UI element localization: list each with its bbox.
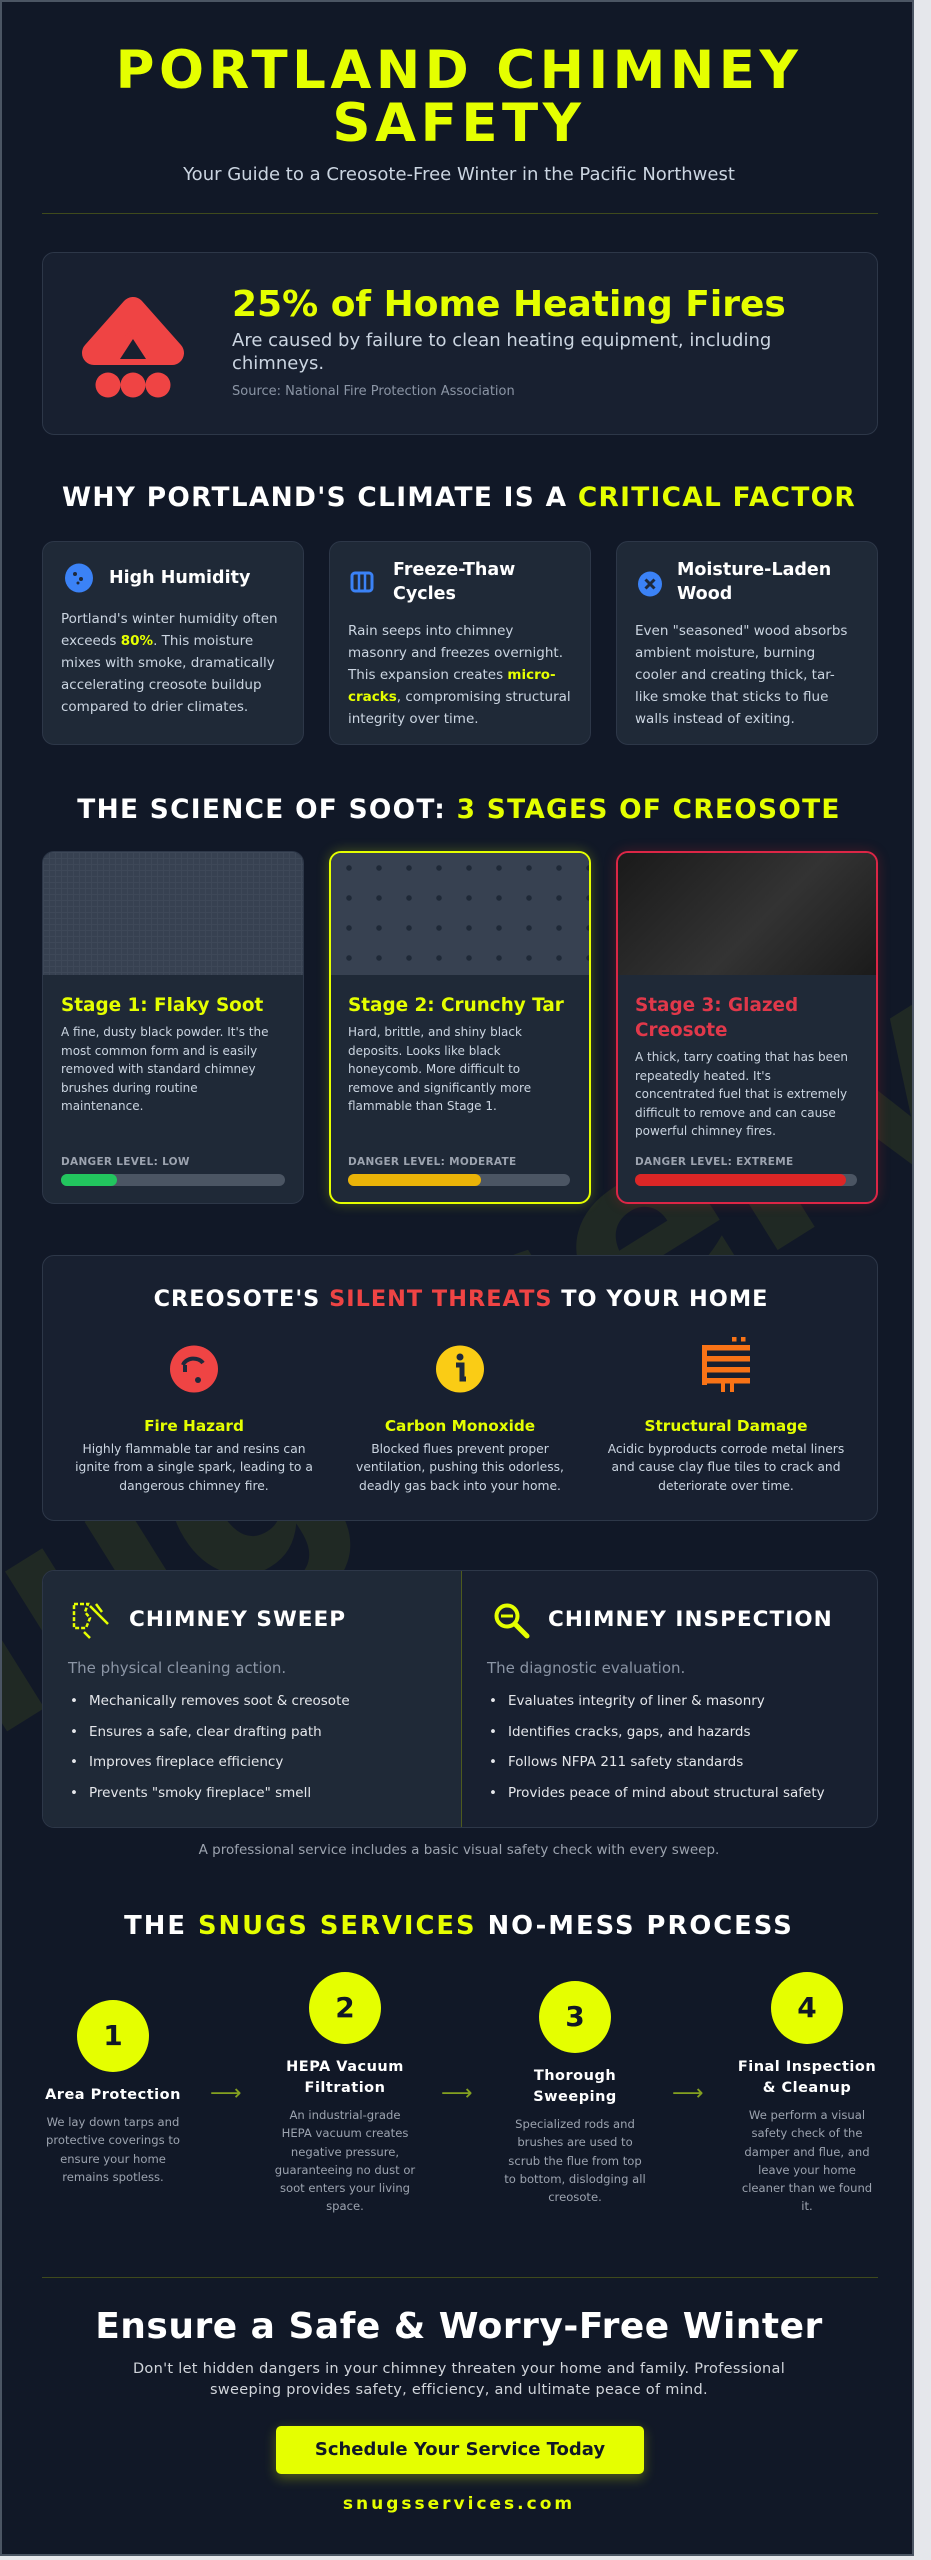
panel: sweep vs inspection — [42, 1570, 878, 1828]
sweep column: CHIMNEY SWEEP — [129, 1607, 346, 1632]
card: wood — [616, 541, 878, 745]
card: humidity: High Humidity — [109, 568, 250, 588]
icon: freeze — [350, 572, 374, 592]
CTA button — [276, 2426, 644, 2474]
step 1: We lay down tarps and protective coverings to ensure your home remains spotless. — [46, 2115, 180, 2184]
sweep column: Improves fireplace efficiency — [89, 1754, 283, 1770]
card: wood: Wood — [677, 584, 732, 604]
danger bar moderate — [348, 1174, 570, 1186]
sweep column: The physical cleaning action. — [68, 1659, 286, 1677]
threat: structural: Acidic byproducts corrode metal liners and cause clay flue tiles to crack and deteriorate over time. — [608, 1442, 844, 1493]
step 1 — [45, 2000, 181, 2184]
stat card — [42, 252, 878, 435]
threat: CO: Carbon Monoxide — [385, 1417, 535, 1435]
sweep column: Mechanically removes soot & creosote — [89, 1693, 350, 1709]
source: Source: National Fire Protection Association — [232, 384, 515, 399]
footnote: A professional service includes a basic visual safety check with every sweep. — [199, 1842, 719, 1858]
arrow 1: ⟶ — [210, 2081, 242, 2106]
step 4: We perform a visual safety check of the damper and flue, and leave your home cleaner than we found it. — [742, 2108, 872, 2213]
card: wood: Moisture-Laden — [677, 560, 831, 580]
arrow 3: ⟶ — [672, 2081, 704, 2106]
stage 2 card: DANGER LEVEL: MODERATE — [348, 1156, 516, 1168]
subtitle: Your Guide to a Creosote-Free Winter in the Pacific Northwest — [183, 164, 735, 185]
threat: fire — [75, 1346, 313, 1493]
stage 1 card: DANGER LEVEL: LOW — [61, 1156, 190, 1168]
stage 1 card: A fine, dusty black powder. It's the most common form and is easily removed with standard chimney brushes during routine maintenance. — [61, 1025, 268, 1113]
card: humidity — [42, 541, 304, 745]
inspection column: Identifies cracks, gaps, and hazards — [508, 1724, 751, 1740]
stage 1 card — [42, 851, 304, 1204]
stage 3 title: Creosote — [635, 1020, 728, 1041]
danger bar extreme — [635, 1174, 857, 1186]
inspection column: The diagnostic evaluation. — [487, 1659, 685, 1677]
CTA button: Schedule Your Service Today — [315, 2439, 605, 2460]
step 2 — [275, 1972, 416, 2213]
card: wood: Even "seasoned" wood absorbs ambient moisture, burning cooler and creating thick, tar-like smoke that sticks to flue walls instead of exiting. — [635, 623, 847, 727]
step 4 — [738, 1972, 876, 2213]
title: PORTLAND CHIMNEY — [116, 40, 802, 101]
stage 2 card: Hard, brittle, and shiny black deposits. Looks like black honeycomb. More difficult to remove and significantly more flammable than Stage 1. — [348, 1025, 531, 1113]
inspection column: Evaluates integrity of liner & masonry — [508, 1693, 765, 1709]
stage 3 card: DANGER LEVEL: EXTREME — [635, 1156, 793, 1168]
step 4: 4 — [797, 1991, 817, 2024]
heading: climate: WHY PORTLAND'S CLIMATE IS A CRITICAL FACTOR — [62, 482, 856, 513]
threat: structural: Structural Damage — [644, 1417, 808, 1435]
CTA heading: Ensure a Safe & Worry-Free Winter — [95, 2306, 823, 2347]
sweep column — [68, 1602, 350, 1800]
stat headline: 25% of Home Heating Fires — [232, 284, 786, 325]
stage 2 title: Stage 2: Crunchy Tar — [348, 995, 564, 1016]
arrow 2: ⟶ — [441, 2081, 473, 2106]
sweep column: Ensures a safe, clear drafting path — [89, 1724, 322, 1740]
step 1: Area Protection — [45, 2087, 181, 2103]
threat: fire: Fire Hazard — [144, 1417, 244, 1435]
step 3: Specialized rods and brushes are used to scrub the flue from top to bottom, dislodging all creosote. — [504, 2117, 646, 2204]
stage 3 title: Stage 3: Glazed — [635, 995, 798, 1016]
heading: process: THE SNUGS SERVICES NO-MESS PROCESS — [124, 1911, 794, 1941]
title — [116, 40, 802, 154]
icon: magnifier — [494, 1604, 530, 1638]
icon: humidity — [65, 564, 93, 592]
icon: broom — [72, 1602, 109, 1639]
stage 3 card — [616, 851, 878, 1204]
stage 3 card: A thick, tarry coating that has been repeatedly heated. It's concentrated fuel that is extremely difficult to remove and can cause powerful chimney fires. — [635, 1050, 848, 1138]
card: freeze-thaw: Rain seeps into chimney masonry and freezes overnight. This expansion creates micro-cracks, compromising structural integrity over time. — [348, 623, 571, 727]
step 3 — [504, 1981, 646, 2204]
step 3: Thorough Sweeping — [533, 2068, 617, 2105]
card: freeze-thaw: Cycles — [393, 584, 456, 604]
card: humidity: Portland's winter humidity often exceeds 80%. This moisture mixes with smoke, dramatically accelerating creosote buildup compared to drier climates. — [61, 611, 278, 715]
inspection column — [486, 1604, 833, 1800]
step 4: Final Inspection & Cleanup — [738, 2059, 876, 2096]
stage 2 card — [329, 851, 591, 1204]
threat: CO — [356, 1346, 564, 1493]
step 3: 3 — [565, 2000, 585, 2033]
stat text: Are caused by failure to clean heating equipment, including chimneys. — [232, 330, 771, 374]
card: freeze-thaw — [329, 541, 591, 745]
stage 1 title: Stage 1: Flaky Soot — [61, 995, 263, 1016]
card: freeze-thaw: Freeze-Thaw — [393, 560, 515, 580]
step 2: 2 — [335, 1991, 355, 2024]
step 2: HEPA Vacuum Filtration — [286, 2059, 404, 2096]
inspection column: CHIMNEY INSPECTION — [548, 1607, 833, 1632]
threats heading: CREOSOTE'S SILENT THREATS TO YOUR HOME — [154, 1286, 768, 1312]
heading: science: THE SCIENCE OF SOOT: 3 STAGES OF CREOSOTE — [77, 794, 841, 825]
step 2: An industrial-grade HEPA vacuum creates negative pressure, guaranteeing no dust or soot enters your living space. — [275, 2108, 415, 2213]
website: snugsservices.com — [343, 2494, 575, 2514]
stage 3 title — [635, 995, 798, 1041]
step 1: 1 — [103, 2019, 123, 2052]
inspection column: Follows NFPA 211 safety standards — [508, 1754, 743, 1770]
CTA text: Don't let hidden dangers in your chimney threaten your home and family. Professional sweeping provides safety, efficiency, and ultimate peace of mind. — [133, 2361, 785, 2398]
threat: CO: Blocked flues prevent proper ventilation, pushing this odorless, deadly gas back into your home. — [356, 1442, 564, 1493]
panel: threats — [42, 1255, 878, 1521]
inspection column: Provides peace of mind about structural safety — [508, 1784, 825, 1800]
threat: fire: Highly flammable tar and resins can ignite from a single spark, leading to a dangerous chimney fire. — [75, 1442, 313, 1493]
icon: fire warning — [82, 297, 184, 398]
title: SAFETY — [332, 93, 586, 154]
sweep column: Prevents "smoky fireplace" smell — [89, 1784, 311, 1800]
icon: wood — [638, 572, 662, 596]
danger bar low — [61, 1174, 285, 1186]
threat: structural — [608, 1337, 844, 1493]
